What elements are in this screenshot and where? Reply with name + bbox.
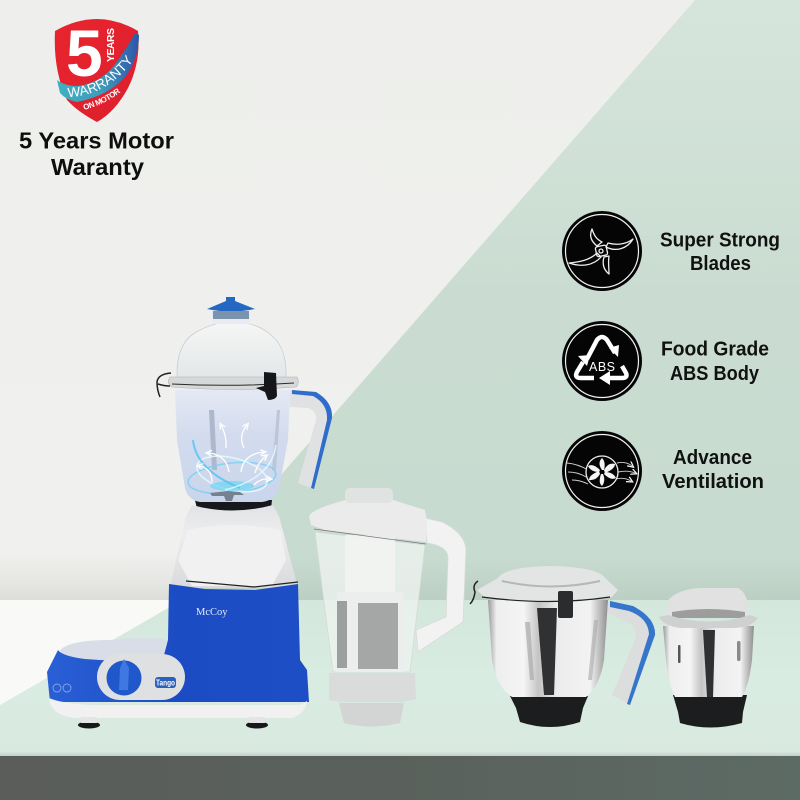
feature: food grade abs body [562, 321, 769, 401]
steel jar with blue handle [470, 566, 655, 727]
warranty ribbon text: WARRANTY [67, 54, 131, 97]
filter core [345, 535, 395, 603]
mesh filter [337, 592, 403, 672]
dark reflection [537, 608, 557, 695]
dome lid [177, 322, 286, 378]
steel body [663, 626, 754, 697]
base plate white [60, 638, 170, 665]
lid knob [345, 488, 393, 503]
number 5: 5 [66, 16, 103, 90]
steel body [488, 600, 608, 697]
dark reflection [703, 630, 715, 697]
icon: abs recycling triangle [562, 321, 642, 401]
lid [667, 588, 748, 617]
jar handle [289, 390, 332, 489]
collar [329, 673, 416, 702]
black base [673, 695, 747, 728]
feature: advance ventilation [562, 431, 764, 511]
main mixer with blue jar [47, 297, 332, 728]
rim [659, 615, 758, 628]
lid cap blue [207, 297, 255, 312]
black collar [195, 500, 272, 513]
label: Blades [690, 253, 751, 275]
icon: red shield [55, 19, 139, 122]
blade assembly [210, 491, 244, 501]
label [660, 230, 780, 275]
jar body [315, 532, 425, 672]
jar handle [608, 601, 655, 705]
motor blue body [47, 584, 309, 702]
left clip [470, 581, 478, 604]
label: Ventilation [662, 471, 764, 493]
brand name: McCoy [196, 607, 228, 618]
base white strip [49, 698, 307, 718]
glass blender jar [309, 488, 466, 726]
heading: warranty: Waranty [51, 154, 144, 180]
warranty badge [54, 16, 139, 122]
control panel pill [97, 654, 185, 700]
brand tag: Tango [156, 678, 175, 688]
side grooves [525, 620, 598, 680]
left clip [157, 373, 171, 397]
years label: YEARS [105, 28, 117, 62]
jar body with blue liquid [175, 390, 290, 502]
side grooves [678, 641, 740, 663]
latch [558, 591, 573, 618]
black base [510, 696, 588, 727]
airflow arrows [199, 425, 270, 485]
feet [78, 722, 268, 728]
icon: blades [562, 211, 642, 291]
lid [309, 500, 427, 542]
latch [256, 372, 277, 400]
small steel jar [659, 588, 758, 728]
motor head white [170, 505, 298, 588]
label: ABS Body [670, 363, 760, 385]
heading: warranty: 5 Years Motor [19, 128, 174, 154]
motion swirl [187, 440, 277, 498]
label: Advance [673, 447, 752, 469]
heading: warranty [19, 128, 174, 180]
lid neck [212, 310, 250, 324]
label: Food Grade [661, 338, 769, 360]
on motor label: ON MOTOR [84, 88, 120, 110]
label [662, 447, 764, 493]
feature: super strong blades [562, 211, 780, 291]
jar ribs [209, 410, 280, 470]
lid [477, 566, 618, 602]
foot [339, 703, 404, 726]
label [661, 338, 769, 385]
brand tag [155, 677, 176, 688]
metal rim [168, 377, 298, 390]
certification marks [53, 684, 71, 692]
label: Super Strong [660, 230, 780, 252]
dial knob [106, 659, 142, 696]
jar handle [416, 518, 466, 652]
icon: abs recycling triangle: ABS [589, 360, 615, 374]
icon: fan [562, 431, 642, 511]
ribbon [57, 33, 139, 102]
